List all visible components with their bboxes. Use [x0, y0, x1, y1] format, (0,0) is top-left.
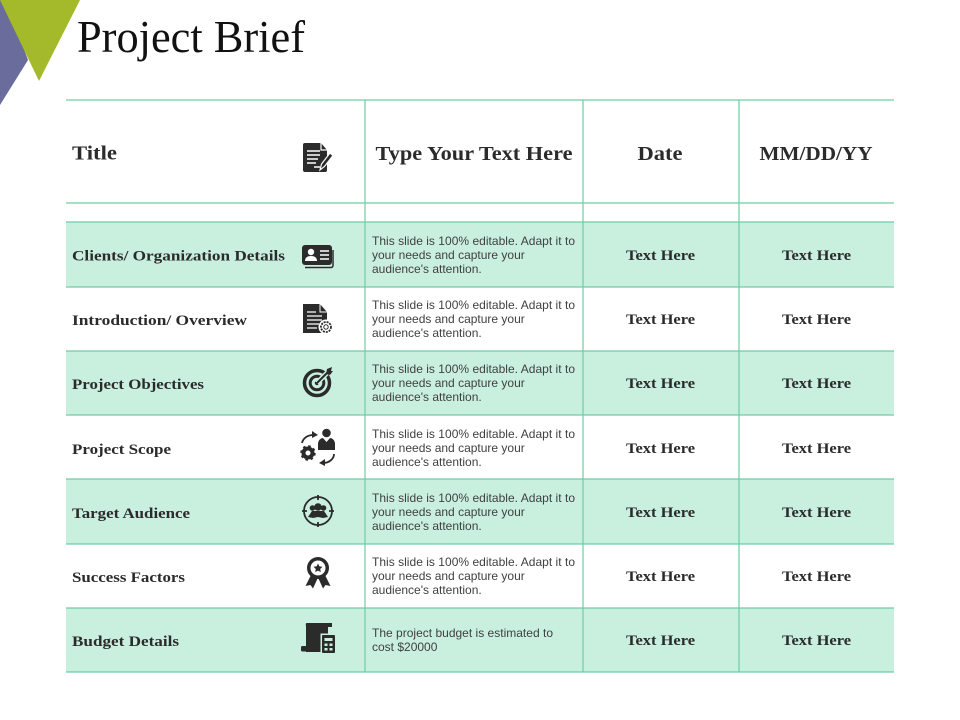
icon: audience in crosshair	[302, 495, 334, 527]
row: Project Objectives: audience's attention.	[372, 390, 482, 404]
row: Target Audience: Text Here	[782, 504, 851, 521]
row: Clients/ Organization Details: audience's attention.	[372, 262, 482, 276]
row: Success Factors: audience's attention.	[372, 583, 482, 597]
row: Clients/ Organization Details: Clients/ Organization Details	[72, 248, 285, 264]
row: Budget Details: Text Here	[626, 632, 695, 649]
header row	[72, 142, 873, 172]
title: Project Brief	[77, 12, 305, 62]
icon: award ribbon	[306, 557, 330, 588]
row: Budget Details: Text Here	[782, 632, 851, 649]
row: Project Scope: Text Here	[626, 440, 695, 457]
icon: scroll with calculator	[301, 623, 336, 654]
row: Project Objectives: Text Here	[782, 375, 851, 392]
row: Budget Details: Budget Details	[72, 633, 179, 650]
row backgrounds	[66, 222, 894, 672]
row: Success Factors	[72, 555, 851, 597]
row: Project Objectives: Text Here	[626, 375, 695, 392]
row: Clients/ Organization Details	[72, 234, 851, 276]
row: Project Scope: audience's attention.	[372, 455, 482, 469]
row: Introduction/ Overview: Text Here	[782, 311, 851, 328]
row: Introduction/ Overview: Introduction/ Overview	[72, 312, 247, 329]
header row: Type Your Text Here	[376, 143, 572, 165]
row: Success Factors: Text Here	[626, 568, 695, 585]
row: Project Scope: your needs and capture your	[372, 441, 525, 455]
row: Success Factors: This slide is 100% editable. Adapt it to	[372, 555, 575, 569]
row: Project Objectives: Project Objectives	[72, 376, 204, 393]
row: Project Scope	[72, 427, 851, 469]
row: Target Audience: Target Audience	[72, 505, 190, 522]
row: Clients/ Organization Details: Text Here	[782, 247, 851, 264]
row: Project Scope: Text Here	[782, 440, 851, 457]
decorative corner triangles	[0, 0, 80, 105]
table	[66, 100, 894, 672]
row: Introduction/ Overview: your needs and capture your	[372, 312, 525, 326]
row: Budget Details: The project budget is estimated to	[372, 626, 553, 640]
row: Success Factors: Success Factors	[72, 569, 185, 586]
row: Budget Details: cost $20000	[372, 640, 438, 654]
row: Project Objectives: your needs and capture your	[372, 376, 525, 390]
icon: gear, person and cycle arrows	[302, 429, 335, 466]
icon: id card	[302, 245, 333, 268]
row: Target Audience: This slide is 100% editable. Adapt it to	[372, 491, 575, 505]
row: Target Audience: your needs and capture your	[372, 505, 525, 519]
header row: MM/DD/YY	[760, 143, 873, 165]
icon: target with arrow	[304, 367, 333, 396]
row: Project Scope: This slide is 100% editable. Adapt it to	[372, 427, 575, 441]
row: Introduction/ Overview	[72, 298, 851, 340]
row: Target Audience: audience's attention.	[372, 519, 482, 533]
row: Clients/ Organization Details: Text Here	[626, 247, 695, 264]
row: Budget Details	[72, 623, 851, 654]
row: Project Objectives: This slide is 100% editable. Adapt it to	[372, 362, 575, 376]
row: Success Factors: Text Here	[782, 568, 851, 585]
header row: Title	[72, 142, 117, 164]
row: Clients/ Organization Details: This slide is 100% editable. Adapt it to	[372, 234, 575, 248]
row: Target Audience	[72, 491, 851, 533]
row: Target Audience: Text Here	[626, 504, 695, 521]
row: Introduction/ Overview: audience's attention.	[372, 326, 482, 340]
row: Introduction/ Overview: This slide is 100% editable. Adapt it to	[372, 298, 575, 312]
row: Project Objectives	[72, 362, 851, 404]
header row: Date	[638, 143, 682, 165]
row: Clients/ Organization Details: your needs and capture your	[372, 248, 525, 262]
row: Introduction/ Overview: Text Here	[626, 311, 695, 328]
icon: document with pen	[303, 143, 333, 172]
row: Project Scope: Project Scope	[72, 441, 171, 458]
row: Success Factors: your needs and capture your	[372, 569, 525, 583]
icon: document with gear	[303, 304, 334, 334]
